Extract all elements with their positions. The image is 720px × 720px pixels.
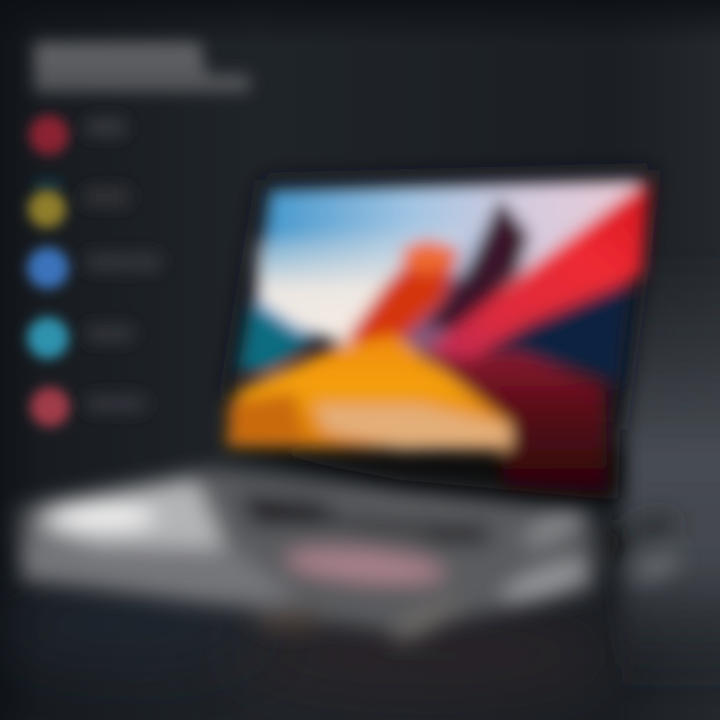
orange red peak (345, 240, 460, 345)
red stripe (425, 178, 650, 360)
laptop lid bezel (215, 170, 655, 500)
heading (illegible blurred text) (34, 42, 250, 92)
laptop screen artwork (226, 178, 650, 492)
brown reflection (256, 608, 324, 632)
mauve ridge (398, 272, 485, 358)
list: five coloured icons with blurred labels (27, 115, 161, 427)
dark purple peak (425, 198, 530, 330)
cream sand (315, 405, 512, 450)
dark hinge connector (601, 528, 627, 560)
item 4: cyan icon and label (27, 317, 134, 359)
keyboard dark zones (238, 495, 350, 525)
right lit column (622, 250, 720, 700)
front lobe (386, 592, 464, 648)
trackpad (284, 544, 446, 588)
item 2: yellow icon and label (28, 179, 130, 228)
teal water (238, 305, 312, 372)
horizon haze (254, 222, 470, 345)
deck (18, 468, 595, 632)
maroon hill (425, 352, 608, 492)
sky (250, 180, 640, 345)
item 3: blue icon and label (27, 247, 161, 289)
right side highlights (519, 501, 587, 553)
deck highlight (40, 480, 225, 548)
navy field (480, 262, 632, 385)
laptop base (18, 468, 683, 648)
item 5: rose icon and label (30, 387, 146, 427)
orange hill (226, 335, 512, 450)
item 1: red icon and label (29, 115, 126, 155)
deck left lighter (20, 540, 300, 600)
